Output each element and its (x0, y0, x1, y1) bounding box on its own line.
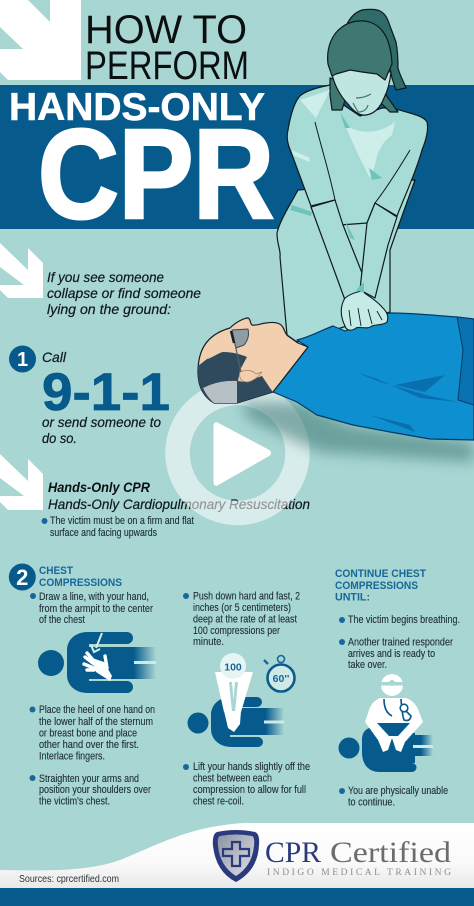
instruction: lift hands (183, 761, 310, 808)
step 1 badge (9, 346, 36, 372)
hair (198, 352, 273, 403)
side hair locks (330, 78, 398, 112)
step 1 text: do so. (42, 430, 77, 446)
icon: stopwatch 60 seconds (264, 656, 294, 692)
icon: patient with hand on chest (38, 632, 156, 693)
continue heading: UNTIL: (335, 592, 370, 604)
sweater shading (290, 112, 382, 240)
instruction: push down: Push down hard and fast, 2 (193, 590, 300, 602)
face (332, 68, 391, 115)
step 2 badge (9, 564, 36, 590)
condition: unable to continue: to continue. (348, 796, 395, 808)
sleeve seams (315, 122, 410, 203)
shirt (273, 313, 474, 440)
title (9, 8, 274, 245)
ponytail (347, 9, 406, 90)
footer white wave (0, 823, 474, 888)
belt area (457, 317, 474, 405)
instruction: lift hands: chest re-coil. (193, 796, 244, 808)
hand highlight (356, 282, 364, 293)
condition: unable to continue (339, 785, 448, 808)
sources: Sources: cprcertified.com (19, 874, 119, 885)
instruction: push down: 100 compressions per (193, 625, 280, 637)
logo: wordmark (265, 836, 451, 878)
skin (198, 318, 308, 403)
trousers (277, 180, 415, 342)
step 1 text: Call (42, 349, 67, 365)
instruction: push down: minute. (193, 636, 224, 648)
instruction: straighten arms: position your shoulders over (39, 784, 151, 796)
step 2 badge: 2 (16, 565, 28, 590)
intro text: collapse or find someone (47, 285, 201, 301)
step 2 heading (39, 565, 122, 589)
illustration: rescuer (277, 9, 428, 342)
instruction: heel of hand: other hand over the first. (39, 739, 139, 751)
instruction: heel of hand: or breast bone and place (39, 728, 137, 740)
title: CPR (38, 103, 274, 245)
step 1 text (42, 349, 170, 446)
icon: large corner arrow (0, 0, 81, 80)
instruction: heel of hand: the lower half of the sternum (39, 716, 153, 728)
instruction: draw a line: of the chest (39, 614, 85, 626)
sweater (287, 85, 428, 225)
instruction: draw a line (30, 591, 153, 626)
continue heading: CONTINUE CHEST (335, 568, 426, 580)
step 1 text: 9-1-1 (42, 363, 170, 422)
instruction: lift hands: chest between each (193, 772, 272, 784)
logo: shield (213, 830, 259, 882)
condition: another responder: take over. (348, 659, 387, 671)
instruction: heel of hand: Place the heel of one hand on (39, 704, 155, 716)
hands-only definition: Hands-Only Cardiopulmonary Resuscitation (48, 496, 310, 512)
icon: compressions at rate of 100: 100 (224, 662, 242, 674)
instruction: push down (183, 590, 300, 648)
hands-only definition: surface and facing upwards (50, 527, 157, 539)
man's shadow (240, 402, 474, 462)
instruction: lift hands: Lift your hands slightly off the (193, 761, 310, 773)
condition: unable to continue: You are physically unable (348, 785, 448, 797)
step 1 badge: 1 (17, 349, 28, 371)
glasses (232, 329, 248, 348)
instruction: draw a line: Draw a line, with your hand, (39, 591, 149, 603)
icon: hands-only arrow (0, 454, 43, 510)
instruction: straighten arms: Straighten your arms and (39, 773, 139, 785)
shirt folds (358, 373, 458, 432)
icon: play triangle (215, 424, 270, 484)
condition: another responder: arrives and is ready to (348, 648, 435, 660)
icon: trained responder over patient (338, 674, 433, 772)
hair cap (328, 21, 392, 80)
logo: wordmark: INDIGO MEDICAL TRAINING (267, 868, 451, 878)
logo: wordmark: CPR (265, 836, 321, 869)
grey hair under ring (203, 381, 237, 403)
step 1 text: or send someone to (42, 414, 161, 430)
title: HOW TO (85, 8, 247, 52)
instruction: heel of hand: Interlace fingers. (39, 750, 105, 762)
continue heading: COMPRESSIONS (335, 580, 418, 592)
sweater highlights (292, 90, 395, 178)
title: PERFORM (85, 44, 249, 88)
intro text (47, 269, 201, 317)
ear (240, 370, 262, 382)
instruction: push down: inches (or 5 centimeters) (193, 602, 291, 614)
title band (0, 85, 474, 229)
step 2 heading: COMPRESSIONS (39, 577, 122, 589)
instruction: straighten arms: the victim's chest. (39, 796, 110, 808)
bottom band (0, 888, 474, 906)
eyes and mouth (353, 94, 371, 112)
arm right (360, 203, 397, 298)
collar (273, 344, 308, 392)
condition: another responder: Another trained responder (348, 636, 453, 648)
icon: stopwatch 60 seconds: 60'' (273, 673, 289, 685)
instruction: straighten arms (30, 773, 151, 808)
video play ring (178, 393, 298, 513)
icon: compressions at rate of 100 (188, 653, 284, 747)
intro text: lying on the ground: (47, 301, 171, 317)
step 2 heading: CHEST (39, 565, 73, 577)
glasses arm (232, 330, 241, 372)
icon: intro arrow (0, 243, 43, 298)
instruction: heel of hand (30, 704, 155, 762)
illustration: patient (198, 313, 474, 440)
title: HANDS-ONLY (9, 86, 265, 129)
hands-only definition: The victim must be on a firm and flat (50, 515, 194, 527)
instruction: lift hands: compression to allow for full (193, 784, 306, 796)
instruction: draw a line: from the armpit to the center (39, 603, 153, 615)
hands-only definition (42, 479, 310, 539)
intro text: If you see someone (47, 269, 164, 285)
illustration: interlaced hands (341, 282, 388, 330)
condition: another responder (339, 636, 453, 671)
logo: wordmark: Certified (330, 836, 451, 869)
eye (231, 331, 234, 343)
continue heading (335, 568, 426, 604)
arm left (311, 200, 368, 300)
instruction: push down: deep at the rate of at least (193, 614, 297, 626)
hands-only definition: Hands-Only CPR (48, 479, 151, 495)
